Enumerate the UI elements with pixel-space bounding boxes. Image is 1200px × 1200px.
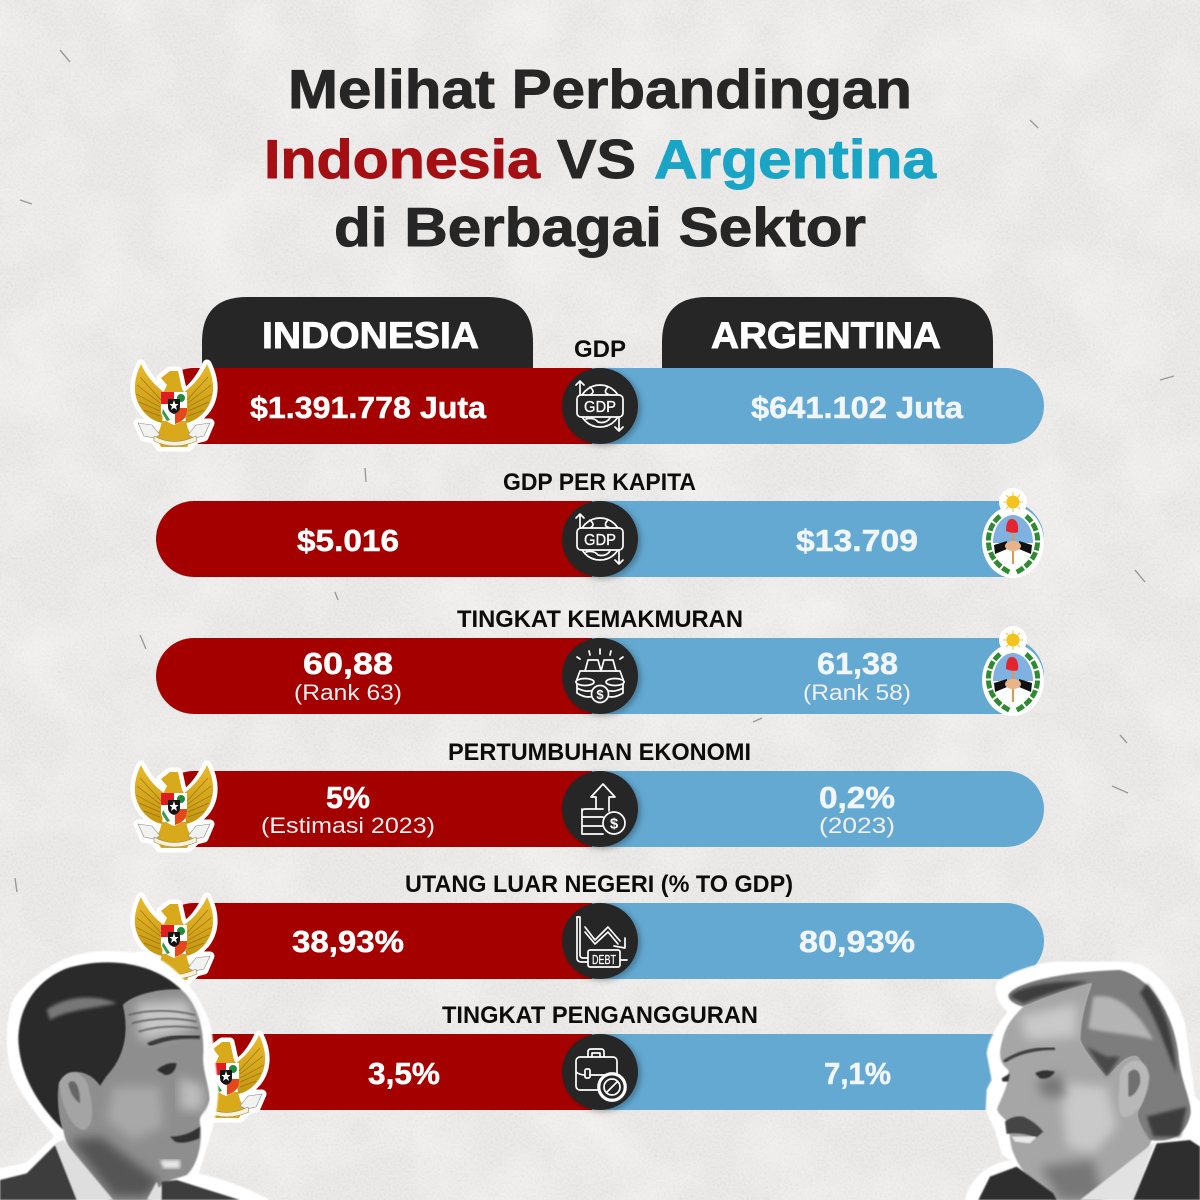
row: Pertumbuhan Ekonomi: (2023) [819,813,895,838]
row: Utang Luar Negeri: UTANG LUAR NEGERI (% TO GDP) [405,871,793,898]
title: di Berbagai Sektor [334,196,866,258]
title: Argentina [654,128,936,190]
row: Pertumbuhan Ekonomi [135,739,1044,848]
row: GDP per kapita [156,469,1044,578]
row: Tingkat Kemakmuran: 60,88 [303,646,393,681]
tab: Indonesia header: INDONESIA [262,315,479,356]
row: GDP: $641.102 Juta [751,390,964,425]
tab: Argentina header: ARGENTINA [711,315,941,356]
portrait: Indonesian leader, left [0,953,267,1200]
tab: Indonesia header [202,297,533,370]
title: VS [557,128,636,190]
row: GDP [135,336,1044,447]
row: Utang Luar Negeri: 80,93% [799,924,915,959]
row: GDP per kapita: GDP PER KAPITA [503,469,696,496]
row: Utang Luar Negeri [135,871,1044,980]
row: Tingkat Kemakmuran: TINGKAT KEMAKMURAN [457,606,743,633]
portrait: Argentine leader, right [967,963,1200,1200]
title: Indonesia [264,128,540,190]
row: Tingkat Kemakmuran: (Rank 63) [294,680,402,705]
row: Pertumbuhan Ekonomi: PERTUMBUHAN EKONOMI [448,739,751,766]
row: Pertumbuhan Ekonomi: 5% [326,780,370,815]
row: GDP per kapita: $13.709 [796,523,918,558]
title: Melihat Perbandingan [288,58,912,120]
row: Tingkat Kemakmuran: 61,38 [817,646,898,681]
row: Tingkat Pengangguran: 3,5% [368,1056,440,1091]
row: Pertumbuhan Ekonomi: 0,2% [819,780,895,815]
title [264,58,936,258]
row: Tingkat Kemakmuran: (Rank 58) [803,680,911,705]
row: Tingkat Pengangguran: TINGKAT PENGANGGURAN [442,1002,758,1029]
row: Tingkat Kemakmuran [156,606,1044,716]
tab: Argentina header [662,297,993,370]
row: GDP per kapita: $5.016 [297,523,399,558]
row: Tingkat Pengangguran [187,1002,1044,1118]
row: GDP: GDP [574,336,626,363]
row: Utang Luar Negeri: 38,93% [292,924,404,959]
row: GDP: $1.391.778 Juta [250,390,487,425]
row: Tingkat Pengangguran: 7,1% [824,1056,891,1091]
row: Pertumbuhan Ekonomi: (Estimasi 2023) [261,813,435,838]
